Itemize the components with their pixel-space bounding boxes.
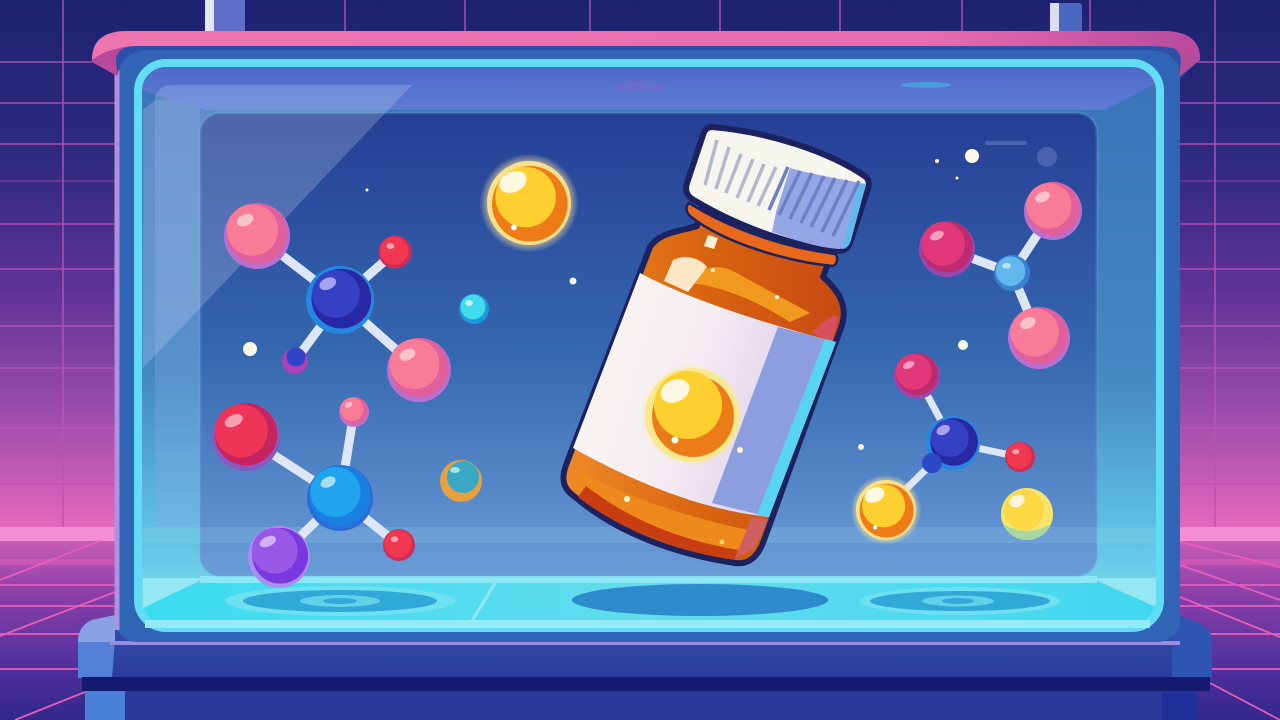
tank lid [92,31,1200,78]
glass top band [140,63,1155,110]
floor shadow under bottle [572,584,828,616]
amber supplement bottle [563,127,869,563]
horizon reflection in back wall [142,527,1156,543]
teal and orange bead [440,460,482,502]
molecule: bottom right [894,353,1035,490]
cyan bead [459,294,489,324]
glass interior side panels [138,63,1160,628]
glass reflection [143,85,412,368]
floating particles [243,141,1057,450]
tank body [115,48,1180,642]
cyan glass rim [138,63,1160,628]
molecule: bottom left [212,397,415,588]
background: neon grid wall [0,0,1280,530]
molecule: top right [919,182,1082,369]
tank back wall [200,113,1097,576]
floor ripple right [860,587,1060,615]
left side panel tint [155,100,200,530]
tank base [78,615,1212,720]
yellow softgel [1001,488,1053,540]
floor ripple left [225,586,455,616]
bottle label [573,273,836,517]
background: grid floor [0,541,1280,720]
bottle neck ring [686,203,837,266]
bottle glass body [563,210,844,563]
golden softgel: lower right [851,475,921,545]
tank support posts [205,0,1082,33]
softgel on label [640,363,744,467]
tank water floor [143,580,1155,624]
glints on bottle [624,268,779,544]
molecule: top left [224,203,451,402]
background: glowing horizon band [0,527,1280,541]
bottle cap [686,127,869,251]
golden softgel: upper left [479,153,579,253]
